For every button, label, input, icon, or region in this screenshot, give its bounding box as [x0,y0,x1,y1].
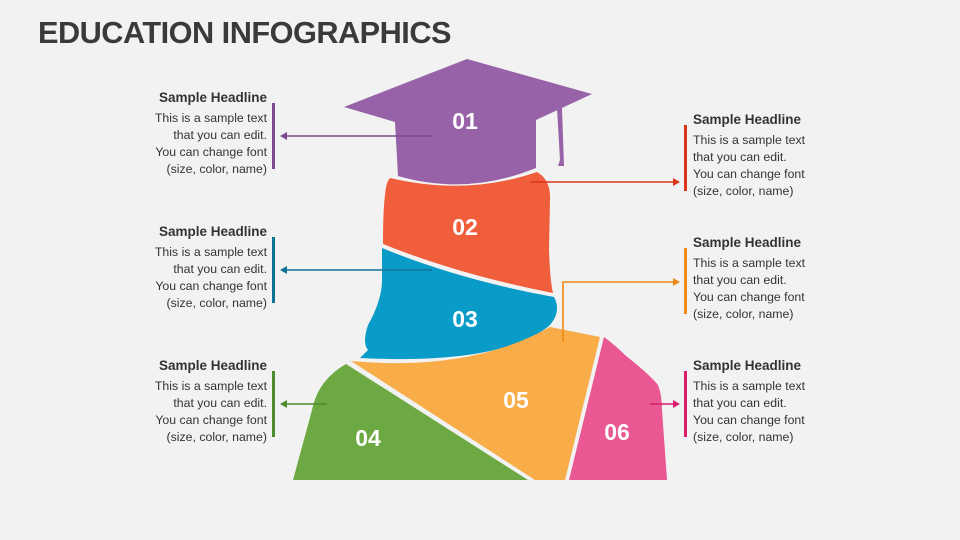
text block 01 [155,90,267,176]
text block 04: that you can edit. [173,396,267,410]
segment 03 [360,248,557,359]
text block 02: This is a sample text [693,133,805,147]
text block 05: (size, color, name) [693,307,793,321]
text block 06 [693,358,805,444]
title: EDUCATION INFOGRAPHICS [38,15,451,50]
text block 03: that you can edit. [173,262,267,276]
segment 06: 06 [604,419,630,445]
segment 04: 04 [355,425,381,451]
text block 03: Sample Headline [159,224,267,239]
text block 05: Sample Headline [693,235,801,250]
text block 04: Sample Headline [159,358,267,373]
text block 05: You can change font [693,290,805,304]
arrows [280,132,680,408]
segment 02 [383,172,553,293]
segment 06 [569,337,667,480]
text block 04: (size, color, name) [167,430,267,444]
text block 04: You can change font [155,413,267,427]
text block 02: (size, color, name) [693,184,793,198]
segment 01: cap: 01 [452,108,478,134]
text block 03: This is a sample text [155,245,267,259]
text block 01: This is a sample text [155,111,267,125]
text block 02: You can change font [693,167,805,181]
text block 01: You can change font [155,145,267,159]
text block 03 [155,224,267,310]
text block 03: You can change font [155,279,267,293]
segment 04 [293,364,528,480]
text block 06: that you can edit. [693,396,787,410]
text block 05: This is a sample text [693,256,805,270]
text block 04: This is a sample text [155,379,267,393]
text block 06: This is a sample text [693,379,805,393]
text block 01: that you can edit. [173,128,267,142]
text block 02 [693,112,805,198]
segment 05: 05 [503,387,529,413]
text block 05: that you can edit. [693,273,787,287]
segment 01: cap [344,59,592,184]
text block 01: Sample Headline [159,90,267,105]
segment 02: 02 [452,214,478,240]
text block 01: (size, color, name) [167,162,267,176]
text block 04 [155,358,267,444]
text block 06: Sample Headline [693,358,801,373]
segment 05 [351,327,600,480]
text block 03: (size, color, name) [167,296,267,310]
text block 02: that you can edit. [693,150,787,164]
text block 06: (size, color, name) [693,430,793,444]
text block 02: Sample Headline [693,112,801,127]
segment 03: 03 [452,306,478,332]
text block 05 [693,235,805,321]
text block 06: You can change font [693,413,805,427]
